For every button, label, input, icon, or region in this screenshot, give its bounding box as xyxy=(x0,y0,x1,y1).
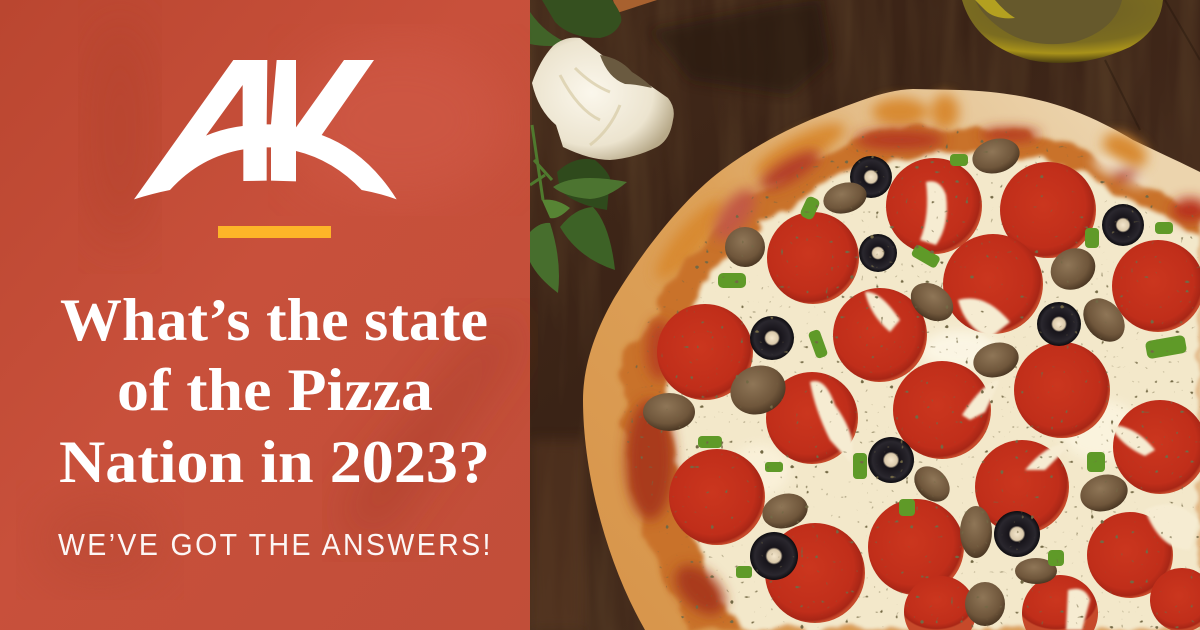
heading: What’s the state xyxy=(60,287,488,353)
logo: AK xyxy=(134,60,397,199)
pizza xyxy=(583,89,1200,630)
heading xyxy=(59,287,490,495)
cheese surface xyxy=(668,152,1200,630)
sauce and cheese patches xyxy=(626,128,1200,624)
background: wooden table xyxy=(530,0,1200,630)
icon: olive oil jar xyxy=(962,0,1163,63)
black olives xyxy=(750,156,1144,580)
pepperoni slices xyxy=(657,158,1200,630)
subheading: WE’VE GOT THE ANSWERS! xyxy=(58,528,493,562)
oregano specks xyxy=(600,120,1200,630)
melted cheese streaks xyxy=(810,181,1198,630)
sausage pieces xyxy=(643,133,1133,626)
heading: Nation in 2023? xyxy=(59,429,490,495)
crust xyxy=(583,89,1200,630)
sauce ring xyxy=(624,125,1200,630)
accent bar xyxy=(218,226,331,238)
icon: basil leaves xyxy=(530,0,657,293)
heading: of the Pizza xyxy=(117,357,433,423)
panel: red left panel xyxy=(0,0,530,630)
icon: garlic bulb xyxy=(532,38,674,160)
baked orange crust patches xyxy=(647,94,1153,287)
green peppers xyxy=(698,154,1187,578)
